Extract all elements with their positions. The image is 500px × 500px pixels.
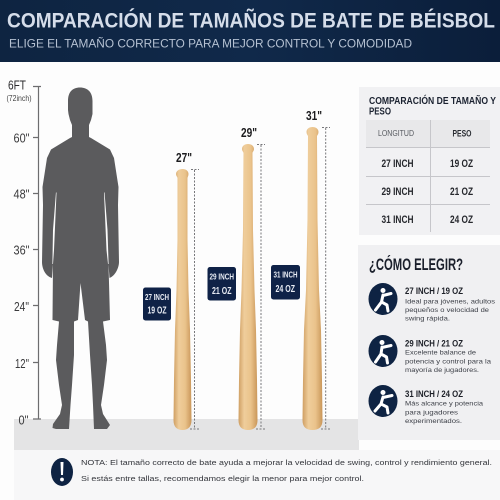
icon: exclamation [51, 458, 73, 486]
panel: size and weight table: LONGITUD [378, 129, 414, 138]
footer note [51, 458, 492, 486]
header banner [0, 0, 500, 62]
recommendation 27 [405, 286, 496, 322]
size badge 29 inch: 29 INCH [210, 272, 234, 282]
height ruler: 12" [15, 356, 29, 371]
height ruler: 24" [14, 299, 29, 314]
icon: batter 27 [368, 283, 398, 315]
recommendation 31: 31 INCH / 24 OZ [405, 389, 463, 400]
recommendation 29: potencia y control para la [405, 358, 491, 366]
bat 29 inch: 29" [241, 125, 257, 140]
icon: batter 29 [368, 335, 398, 367]
table heading: PESO [369, 106, 391, 118]
panel: size and weight table: 29 INCH [382, 186, 414, 198]
size badge 27 inch: 19 OZ [148, 304, 167, 316]
recommendation 29 [405, 338, 491, 374]
human silhouette [42, 88, 119, 429]
recommendation 27: pequeños o velocidad de [405, 307, 489, 314]
recommendation 31: experimentados. [405, 418, 462, 425]
size badge 27 inch: 27 INCH [145, 293, 169, 302]
bat 27 inch: 27" [176, 150, 192, 165]
panel: size and weight table: 24 OZ [450, 214, 473, 226]
recommendation 31: Más alcance y potencia [405, 400, 483, 408]
recommendation 31 [405, 389, 483, 425]
bat 29 inch [238, 125, 265, 430]
panel: size and weight table: 31 INCH [382, 214, 414, 226]
panel: size and weight table: 21 OZ [450, 186, 473, 198]
size badge 27 inch [143, 288, 171, 320]
height ruler: 0" [18, 412, 29, 428]
note text: NOTA: El tamaño correcto de bate ayuda a mejorar la velocidad de swing, control y rendimiento general. [81, 458, 492, 467]
size badge 29 inch [208, 267, 236, 300]
panel: size and weight table [359, 87, 500, 235]
recommendation 29: mayoría de jugadores. [405, 367, 479, 374]
recommendation 29: Excelente balance de [405, 350, 476, 356]
icon: batter 31 [368, 385, 398, 417]
height ruler: 36" [14, 242, 30, 258]
height ruler: 6FT [8, 78, 26, 92]
recommendation 27: Ideal para jóvenes, adultos [405, 298, 496, 306]
panel: size and weight table: 27 INCH [382, 158, 414, 170]
size badge 29 inch: 21 OZ [212, 285, 232, 297]
size badge 31 inch: 24 OZ [276, 283, 295, 295]
height ruler: 48" [14, 186, 30, 202]
panel: size and weight table: 19 OZ [450, 158, 473, 170]
recommendation 29: 29 INCH / 21 OZ [405, 338, 463, 350]
bat 31 inch: 31" [306, 108, 322, 123]
size badge 31 inch [271, 265, 300, 300]
bat 27 inch [174, 150, 199, 430]
bat 31 inch [302, 108, 330, 430]
recommendation 27: 27 INCH / 19 OZ [405, 286, 463, 297]
subtitle: ELIGE EL TAMAÑO CORRECTO PARA MEJOR CONTROL Y COMODIDAD [9, 36, 412, 50]
recommendation 31: para jugadores [405, 410, 459, 416]
height ruler: 60" [14, 130, 30, 146]
height ruler [6, 78, 41, 428]
panel: size and weight table: PESO [452, 128, 472, 138]
footer note: Si estás entre tallas, recomendamos elegir la menor para mejor control. [81, 474, 364, 483]
recommendation 27: swing rápida. [405, 316, 450, 322]
size badge 31 inch: 31 INCH [274, 270, 298, 280]
height ruler: (72inch) [6, 94, 32, 103]
panel: how to choose [358, 245, 500, 440]
